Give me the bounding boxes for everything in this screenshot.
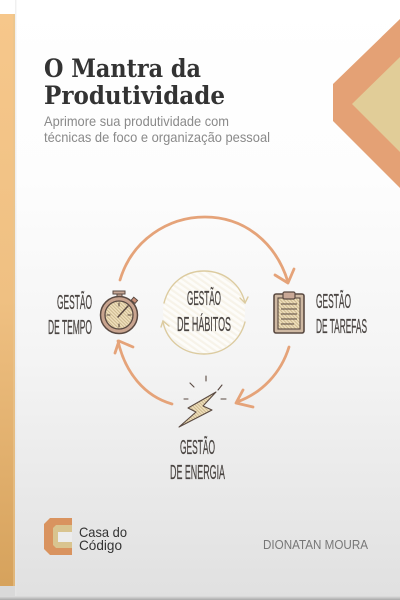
label: gestão de energia <box>170 435 225 484</box>
subtitle: técnicas de foco e organização pessoal <box>44 129 270 145</box>
arrow: tempo to tarefas <box>120 217 294 283</box>
label: gestão de tarefas <box>316 289 367 338</box>
subtitle <box>44 113 270 145</box>
subtitle: Aprimore sua produtividade com <box>44 113 229 129</box>
book cover: GESTÃO <box>57 290 92 314</box>
title: Produtividade <box>44 81 225 110</box>
central circle: gestão de hábitos <box>161 271 248 354</box>
bottom edge shadow <box>0 596 400 600</box>
book cover: DE TEMPO <box>48 317 92 339</box>
label: gestão de hábitos: GESTÃO <box>187 286 221 310</box>
title: O Mantra da <box>44 54 201 83</box>
book cover: DE ENERGIA <box>170 462 225 484</box>
publisher name: Código <box>79 537 122 553</box>
corner emblem <box>333 19 400 188</box>
book spine <box>0 0 16 600</box>
publisher name: Casa do <box>79 524 127 540</box>
author name: DIONATAN MOURA <box>263 537 368 552</box>
label: gestão de hábitos <box>177 286 231 336</box>
icon: stopwatch <box>100 291 138 334</box>
arrow: tarefas to energia <box>236 347 289 407</box>
icon: clipboard <box>274 292 304 333</box>
label: gestão de tempo <box>48 290 92 339</box>
label: gestão de energia: GESTÃO <box>180 435 215 459</box>
icon: lightning bolt <box>179 376 226 427</box>
publisher logo <box>44 518 127 555</box>
central circle: gestão de hábitos: DE HÁBITOS <box>177 313 231 336</box>
arrow: energia to tempo <box>115 341 172 404</box>
label: gestão de tarefas: GESTÃO <box>316 289 351 313</box>
title <box>44 54 225 110</box>
publisher name <box>79 524 127 553</box>
